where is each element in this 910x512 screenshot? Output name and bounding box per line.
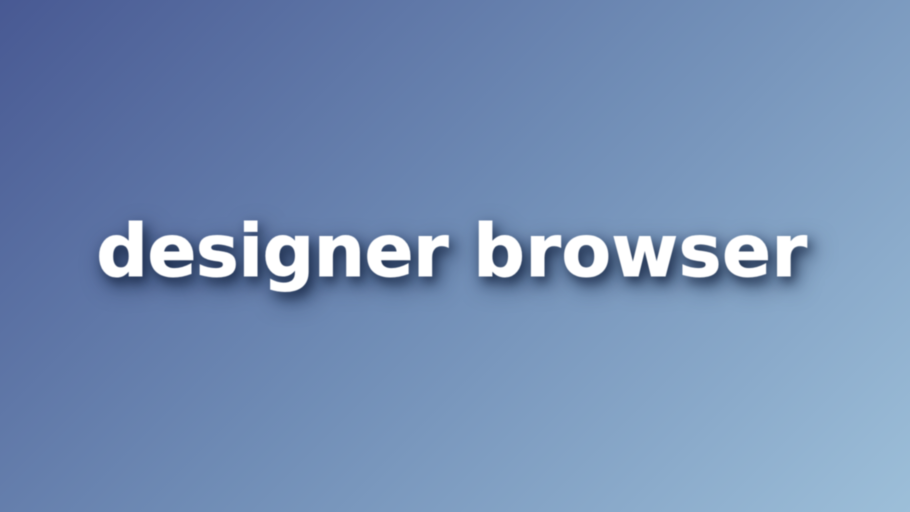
title: designer browser (96, 209, 808, 293)
